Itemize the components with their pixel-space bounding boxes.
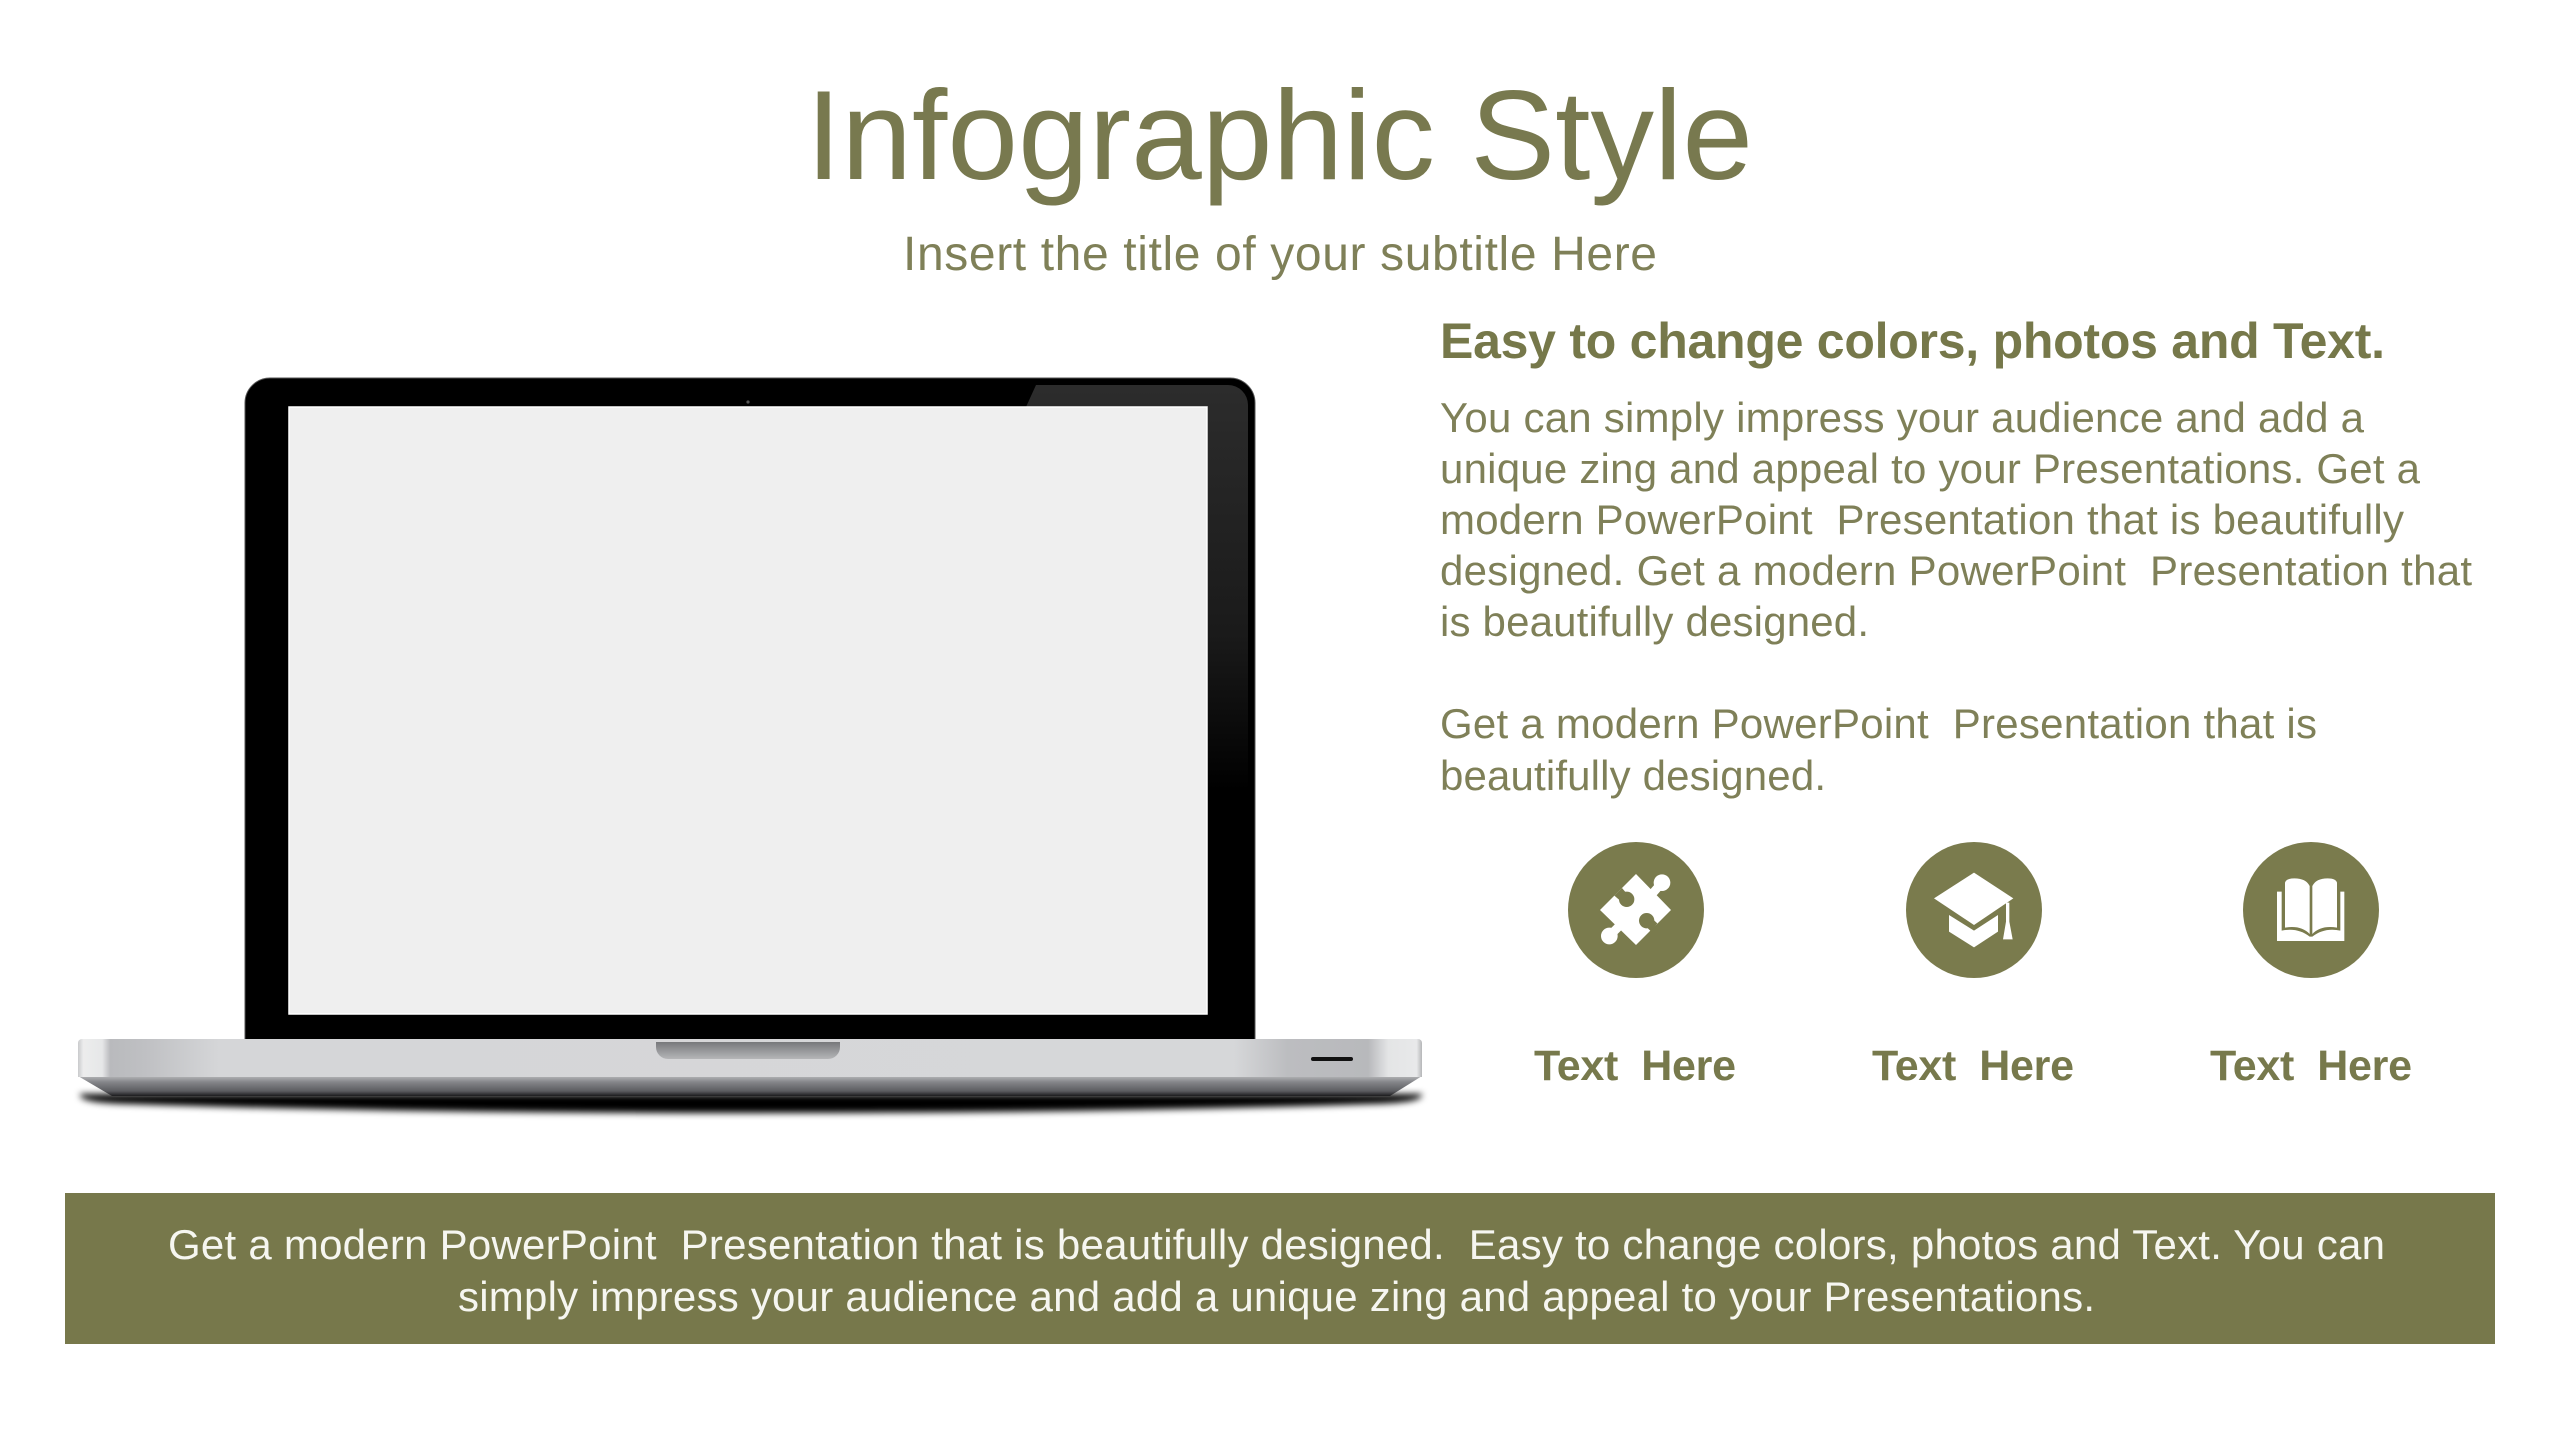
icon label 3: Text Here xyxy=(2210,1042,2412,1090)
body paragraph 2: beautifully designed. xyxy=(1440,752,1826,799)
banner text: simply impress your audience and add a unique zing and appeal to your Presentations. xyxy=(458,1273,2095,1320)
banner text xyxy=(168,1221,2385,1320)
laptop base bevel xyxy=(78,1076,1422,1096)
icon: graduation cap xyxy=(1906,842,2042,978)
subtitle: Insert the title of your subtitle Here xyxy=(903,228,1657,281)
body paragraph 2 xyxy=(1440,700,2317,799)
icon label 2: Text Here xyxy=(1872,1042,2074,1090)
speaker slot xyxy=(1311,1057,1353,1061)
section heading: Easy to change colors, photos and Text. xyxy=(1440,313,2385,369)
laptop shadow xyxy=(80,1094,1422,1113)
lid glare xyxy=(1026,385,1248,1040)
laptop lid xyxy=(245,378,1255,1040)
body paragraph 1: unique zing and appeal to your Presentations. Get a xyxy=(1440,445,2421,492)
body paragraph 1 xyxy=(1440,394,2472,645)
body paragraph 1: is beautifully designed. xyxy=(1440,598,1869,645)
laptop screen xyxy=(289,407,1207,1014)
icon: open book xyxy=(2243,842,2379,978)
title: Infographic Style xyxy=(806,64,1753,206)
banner text: Get a modern PowerPoint Presentation that is beautifully designed. Easy to change colors, photos and Text. You can xyxy=(168,1221,2385,1268)
footer banner xyxy=(65,1193,2495,1344)
trackpad notch xyxy=(656,1042,840,1059)
body paragraph 2: Get a modern PowerPoint Presentation that is xyxy=(1440,700,2317,747)
laptop base face xyxy=(78,1039,1422,1077)
icon: puzzle piece xyxy=(1568,842,1704,978)
body paragraph 1: modern PowerPoint Presentation that is beautifully xyxy=(1440,496,2404,543)
camera xyxy=(746,400,750,404)
body paragraph 1: You can simply impress your audience and add a xyxy=(1440,394,2365,441)
body paragraph 1: designed. Get a modern PowerPoint Presentation that xyxy=(1440,547,2472,594)
icon label 1: Text Here xyxy=(1534,1042,1736,1090)
laptop illustration xyxy=(78,378,1422,1113)
